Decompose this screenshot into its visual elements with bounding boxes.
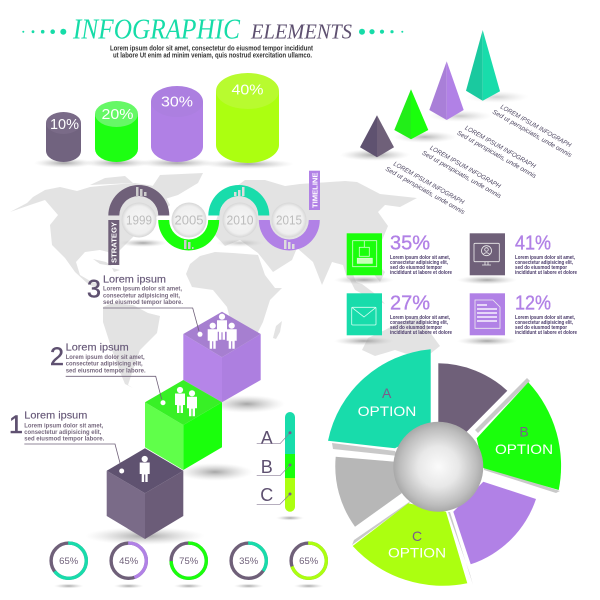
icon: document [475,300,500,328]
stat card 12% [470,292,577,336]
timeline year labels: 2010 [226,213,254,228]
stat card 35%: 35% [390,232,430,254]
stat card 27%: incididunt ut labore et dolore [390,330,452,336]
pyramid teal [466,30,500,101]
pie sector A teal [328,349,431,448]
callout 3: Lorem ipsum dolor sit amet, [103,286,182,293]
donut 65% lime: 65% [299,556,318,566]
donut 65%: 65% [59,556,78,566]
stat card 12%: incididunt ut labore et dolore [515,330,577,336]
callout 1: sed eiusmod tempor labore. [24,436,104,443]
stat card 41%: consectetur adipisicing elit, [515,260,574,266]
timeline year labels: 2015 [276,213,302,228]
pie sector C lime [353,503,467,586]
pyramid label teal: Sed ut perspiciatis, unde omnis [491,109,573,159]
cube 3 purple [183,312,261,402]
stat card 41%: incididunt ut labore et dolore [515,270,577,276]
stat card 41%: sed do eiusmod tempor [515,265,567,271]
isometric cube steps [9,273,285,545]
callout 3: 3 [87,275,101,303]
subtitle text [110,46,314,60]
title decorative dots right [359,29,403,35]
pie sector C lime: C [412,528,422,544]
timeline arc 1999 [108,185,169,216]
stat card 27% [347,292,452,336]
pyramid label teal: LOREM IPSUM INFOGRAPH [499,104,572,149]
cylinder 20% [95,101,138,162]
pyramid label dark: LOREM IPSUM INFOGRAPH [392,161,465,206]
pyramid purple [429,61,464,120]
timeline sphere shadows [119,239,264,247]
title word: INFOGRAPHIC: INFOGRAPHIC [72,14,241,46]
callout 3 [87,273,202,337]
timeline arc 2005 [158,220,219,250]
stat card 35%: incididunt ut labore et dolore [390,270,452,276]
donut 45%: 45% [119,556,138,566]
title word: ELEMENTS: ELEMENTS [250,20,352,44]
pill label B: B [261,457,273,477]
pie sector A teal: OPTION [358,403,416,419]
timeline year spheres [122,202,306,238]
cylinder 10% [46,112,81,162]
icon: one person [140,456,150,482]
pill label A: A [261,428,273,448]
stat card 27%: 27% [390,292,430,314]
stat card 12%: Lorem ipsum dolor sit amet, [515,315,576,321]
donut 75% [171,543,206,578]
donut 45% [111,543,146,578]
world map background [10,173,440,388]
callout 1 [9,409,124,474]
callout 2: Lorem ipsum dolor sit amet, [66,354,145,361]
donut 65% lime [291,543,326,578]
pie sector A teal: A [382,385,392,401]
callout 2: sed eiusmod tempor labore. [66,367,146,374]
icon: tablet [353,241,377,267]
icon: two people [175,387,197,416]
callout 1: Lorem ipsum [24,409,88,421]
callout 3: consectetur adipisicing elit, [103,292,180,299]
icon: envelope [352,307,376,325]
icon: monitor with user [474,243,499,265]
map: Arctic islands and Greenland [90,173,203,199]
pyramid label green: LOREM IPSUM INFOGRAPH [429,145,502,190]
cube 2 green [145,380,222,470]
callout 3: sed eiusmod tempor labore. [103,299,183,306]
timeline [108,171,320,265]
pyramid green [394,89,428,139]
pie sector B green: B [519,424,529,440]
callout 3: Lorem ipsum [103,273,166,285]
stat card 35%: consectetur adipisicing elit, [390,260,449,266]
map: Africa [186,252,282,349]
timeline arc 2015 [259,220,320,250]
pie sector C lime: OPTION [388,545,446,561]
callout 2: 2 [50,343,64,371]
donut 65% [51,543,86,578]
donut 35%: 35% [239,556,258,566]
stat card 35%: sed do eiusmod tempor [390,265,442,271]
callout 1: consectetur adipisicing elit, [24,429,101,436]
timeline year labels: 2005 [174,213,204,228]
ABC vertical pill chart [257,412,304,520]
cylinder 40% [216,73,279,163]
icon: three people [208,314,237,349]
title [22,14,403,46]
donut shadows [54,584,324,588]
stat card 27%: Lorem ipsum dolor sit amet, [390,315,451,321]
stat card 12%: 12% [515,292,551,314]
callout 1: Lorem ipsum dolor sit amet, [24,422,103,429]
cylinder bar chart [34,73,294,169]
pill segments [285,412,295,512]
map: Caribbean [93,259,120,272]
callout 1: 1 [9,411,23,439]
cube shadows [85,395,285,545]
stat card 27%: consectetur adipisicing elit, [390,320,449,326]
map: North America [10,183,170,288]
pyramid shadows [340,91,529,161]
stat card 35%: Lorem ipsum dolor sit amet, [390,255,451,261]
cylinder 40%: 40% [232,81,264,98]
stat card 41%: Lorem ipsum dolor sit amet, [515,255,576,261]
pyramid label green: Sed ut perspiciatis, unde omnis [421,150,503,200]
cylinder 30%: 30% [161,94,193,111]
pyramid label purple: Sed ut perspiciatis, unde omnis [456,130,538,180]
map: Eurasia [212,180,417,285]
pie sector B green: OPTION [495,441,553,457]
pyramid dark [360,115,394,157]
donut charts [51,543,326,588]
strategy tag: STRATEGY [110,222,119,263]
donut 35% [231,543,266,578]
timeline year labels: 1999 [126,213,152,228]
timeline tag [309,171,320,210]
pie center sphere [393,422,483,512]
cube 1 dark [107,448,183,539]
icon: bar glyphs on arcs [136,187,294,249]
pie sector purple [453,482,536,564]
stat card 27%: sed do eiusmod tempor [390,325,442,331]
cylinder 30% [151,86,203,162]
callout 2: consectetur adipisicing elit, [66,361,143,368]
stat card 12%: consectetur adipisicing elit, [515,320,574,326]
pyramid chart [340,30,573,216]
pill shadow [276,516,304,520]
stat cards [334,232,577,346]
timeline year labels [126,213,302,228]
stat card 41% [470,232,577,276]
pie sector shadows [332,378,560,585]
pie sector gray [335,457,402,527]
map: Madagascar [273,321,282,339]
title decorative dots left [22,29,66,35]
pie sector B green [477,382,561,490]
timeline tag: TIMELINE [312,172,319,208]
map: Australia [362,318,440,356]
map: South America [103,303,160,388]
stat card 35% [347,232,452,276]
timeline arc 2010 [208,185,269,216]
exploded pie chart [328,349,561,586]
pie sector dark [438,363,507,432]
pyramid label purple: LOREM IPSUM INFOGRAPH [464,125,537,170]
stat card 41%: 41% [515,232,551,254]
cylinder 10%: 10% [50,116,79,133]
pill label C: C [260,485,273,505]
stat card 12%: sed do eiusmod tempor [515,325,567,331]
cylinder shadows [34,158,294,169]
card shadows [334,276,517,346]
cylinder 20%: 20% [102,106,134,123]
pyramid label dark: Sed ut perspiciatis, unde omnis [384,166,466,216]
callout 2 [50,341,166,405]
map: Southeast Asia islands [350,262,385,304]
subtitle text: Lorem ipsum dolor sit amet, consectetur do eiusmod tempor incididunt [110,46,314,52]
donut 75%: 75% [179,556,198,566]
subtitle text: ut labore Ut enim ad minim veniam, quis nostrud exercitation ullamco. [113,53,312,60]
callout 2: Lorem ipsum [66,341,129,353]
